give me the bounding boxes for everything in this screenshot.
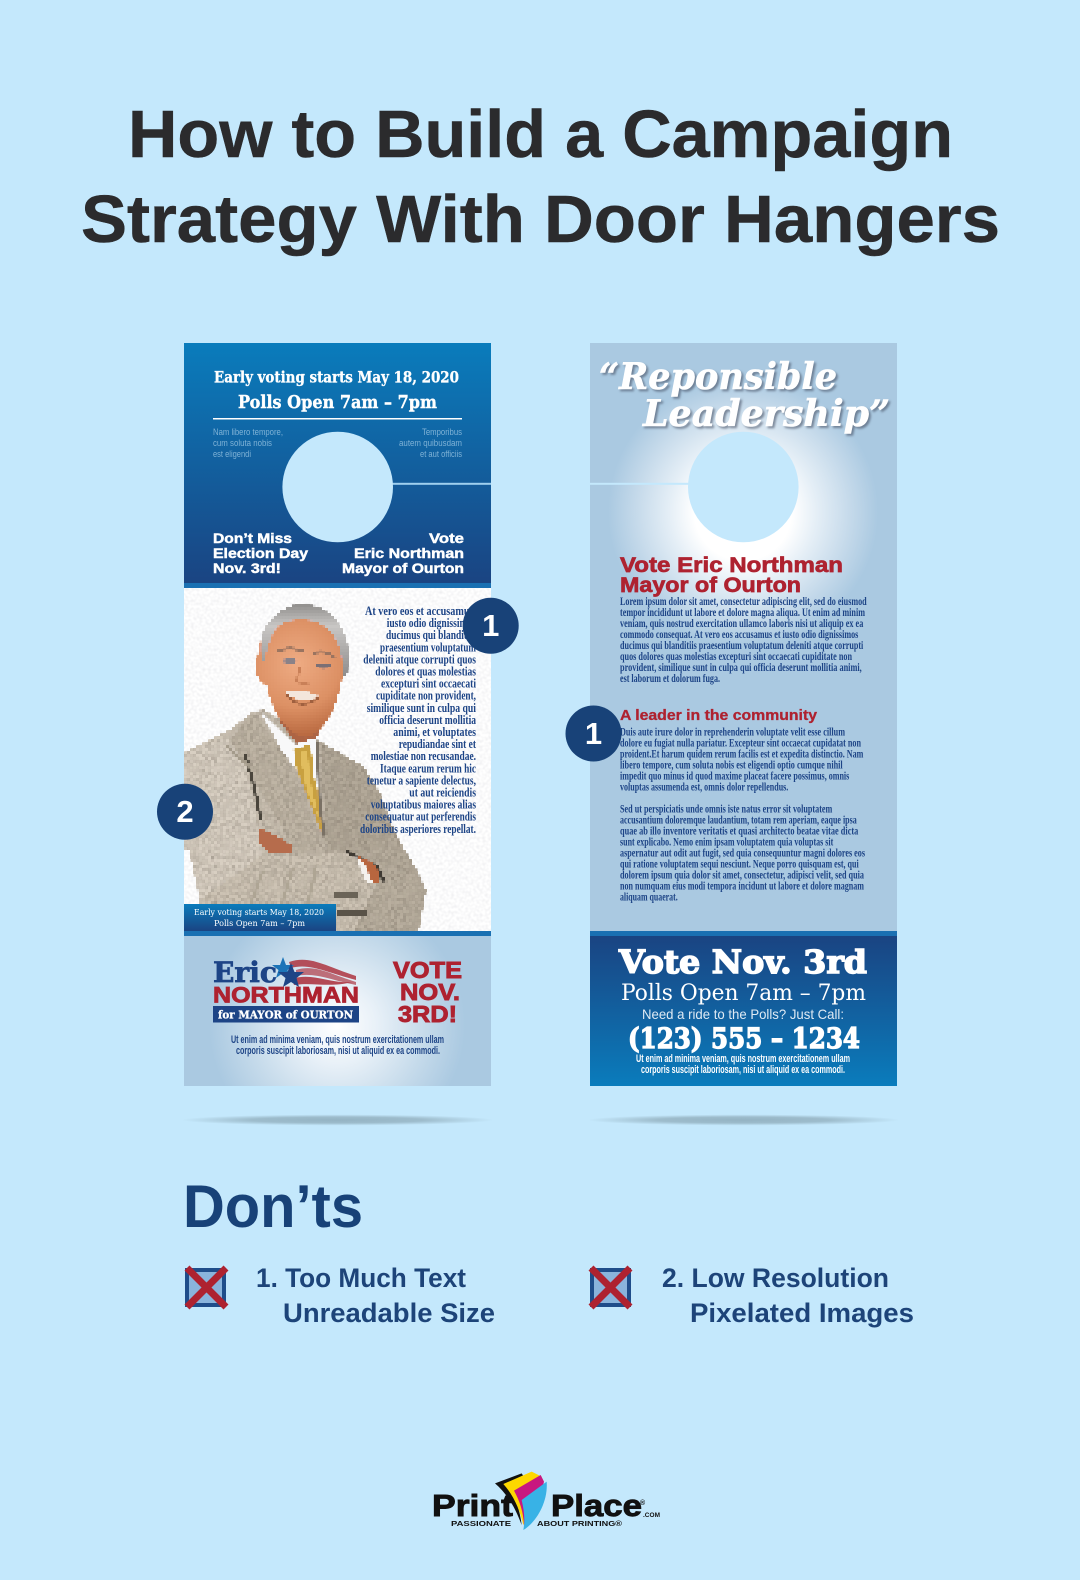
body copy paragraph 1: ducimus qui blanditiis praesentium voluptatum deleniti atque corrupti — [620, 640, 864, 652]
brows and eyes — [278, 648, 335, 658]
logo: PrintPlace: Print — [432, 1488, 513, 1523]
door knob hole — [688, 432, 799, 542]
panel: right door hanger (don't example back) — [590, 343, 897, 1086]
heading: Vote Eric Northman: Vote Eric Northman — [620, 553, 843, 577]
slogan quote: “Reponsible — [599, 356, 837, 398]
heading: Vote Eric Northman — [620, 553, 843, 597]
door knob hole — [282, 432, 393, 542]
icon: folded paper sheets — [495, 1472, 547, 1530]
footer band with candidate logo — [184, 931, 491, 1086]
header band with voting dates: Nam libero tempore, — [213, 427, 283, 437]
body copy: too much text beside photo: officia deserunt mollitia — [379, 713, 477, 727]
body copy: too much text beside photo: consequatur aut perferendis — [365, 810, 476, 824]
header band with voting dates: Vote — [429, 531, 465, 546]
callout 2 on left hanger: 2 — [176, 794, 194, 829]
vote date callout: VOTE — [393, 957, 462, 983]
body copy paragraph 3: qui ratione voluptatem sequi nesciunt. Neque porro quisquam est, qui — [620, 858, 859, 870]
smile — [285, 691, 318, 700]
head — [255, 617, 343, 737]
body copy paragraph 3: dolorem ipsum quia dolor sit amet, consectetur, adipisci velit, sed quia — [620, 869, 864, 881]
photo caption bar: Early voting starts May 18, 2020 — [194, 908, 324, 918]
body copy: too much text beside photo: repudiandae sint et — [399, 737, 477, 751]
body copy paragraph 3: non numquam eius modi tempora incidunt ut labore et dolore magnam — [620, 880, 864, 892]
header band with voting dates — [184, 343, 491, 588]
body copy: too much text beside photo: dolores et quas molestias — [375, 664, 476, 678]
candidate logo: Eric Northman — [213, 956, 359, 1022]
shirt collar — [260, 711, 324, 837]
header band with voting dates: Early voting starts May 18, 2020 — [214, 368, 459, 386]
callout 1 on right hanger: 1 — [585, 716, 602, 751]
body copy: too much text beside photo: tenetur a sapiente delectus, — [367, 773, 476, 787]
body copy paragraph 1: veniam, quis nostrud exercitation ullamco laboris nisi ut aliquip ex ea — [620, 618, 863, 630]
item 1 text: 1. Too Much Text — [256, 1263, 466, 1293]
body copy: too much text beside photo: similique sunt in culpa qui — [367, 701, 476, 715]
item 2: low resolution — [591, 1263, 914, 1328]
pockets — [335, 893, 358, 898]
item 2 text — [662, 1263, 914, 1328]
footer band: vote date and phone: (123) 555 – 1234 — [628, 1022, 860, 1055]
logo: PrintPlace: Place — [551, 1488, 642, 1523]
photo caption bar — [184, 904, 336, 931]
body copy paragraph 1: est laborum et dolorum fuga. — [620, 673, 720, 685]
logo: PrintPlace: PASSIONATE — [451, 1521, 511, 1528]
body copy: too much text beside photo: praesentium voluptatum — [380, 640, 476, 654]
footer band: vote date and phone: corporis suscipit laboriosam, nisi ut aliquid ex ea commodi. — [641, 1064, 845, 1076]
body copy paragraph 1: tempor incididunt ut labore et dolore magna aliqua. Ut enim ad minim — [620, 607, 865, 619]
candidate logo: Eric Northman: NORTHMAN — [213, 982, 359, 1008]
tie — [293, 744, 322, 835]
header band with voting dates: et aut officiis — [420, 449, 462, 459]
body copy: too much text beside photo: molestiae non recusandae. — [371, 749, 476, 763]
body copy paragraph 3: aliquam quaerat. — [620, 891, 678, 903]
body copy: too much text beside photo: cupiditate non provident, — [376, 689, 476, 703]
candidate logo: Eric Northman: for MAYOR of OURTON — [218, 1008, 353, 1022]
header band with voting dates: Temporibus — [422, 427, 462, 437]
photo caption bar: Polls Open 7am – 7pm — [214, 919, 305, 929]
neck — [278, 710, 327, 744]
slogan quote — [599, 356, 890, 435]
footer band: vote date and phone: Ut enim ad minima veniam, quis nostrum exercitationem ullam — [636, 1053, 850, 1065]
icon: crossed checkbox — [187, 1268, 226, 1307]
footer fine print: corporis suscipit laboriosam, nisi ut aliquid ex ea commodi. — [236, 1045, 440, 1057]
body copy paragraph 3: Sed ut perspiciatis unde omnis iste natus error sit voluptatem — [620, 803, 833, 815]
body copy paragraph 2: dolore eu fugiat nulla pariatur. Excepteur sint occaecat cupidatat non — [620, 738, 861, 750]
body copy paragraph 3 — [620, 803, 865, 903]
header band with voting dates: autem quibusdam — [399, 438, 462, 448]
body copy: too much text beside photo: iusto odio dignissimos — [387, 616, 476, 630]
body copy paragraph 2: Duis aute irure dolor in reprehenderin voluptate velit esse cillum — [620, 727, 845, 739]
body copy: too much text beside photo: ducimus qui blanditiis — [386, 628, 476, 642]
header band with voting dates: Nov. 3rd! — [213, 561, 281, 576]
icon: crossed checkbox — [591, 1268, 630, 1307]
body copy paragraph 1: Lorem ipsum dolor sit amet, consectetur adipiscing elit, sed do eiusmod — [620, 596, 867, 608]
vote date callout: 3RD! — [398, 1001, 457, 1027]
ground shadow under right hanger — [588, 1114, 900, 1126]
item 1: too much text — [187, 1263, 495, 1328]
header band with voting dates: Election Day — [213, 546, 309, 561]
slogan quote: Leadership” — [642, 393, 890, 435]
body copy paragraph 3: accusantium doloremque laudantium, totam rem aperiam, eaque ipsa — [620, 814, 857, 826]
body copy paragraph 3: aspernatur aut odit aut fugit, sed quia consequuntur magni dolores eos — [620, 847, 865, 859]
body copy: too much text beside photo: animi, et voluptates — [393, 725, 476, 739]
subheading: a leader in the community: A leader in the community — [620, 707, 818, 724]
header band with voting dates: Polls Open 7am – 7pm — [238, 392, 437, 413]
header band with voting dates: cum soluta nobis — [213, 438, 272, 448]
body copy paragraph 3: sunt explicabo. Nemo enim ipsam voluptatem quia voluptas sit — [620, 836, 833, 848]
title: Strategy With Door Hangers — [81, 182, 1000, 257]
body copy paragraph 2: impedit quo minus id quod maxime placeat facere possimus, omnis — [620, 771, 850, 783]
vote date callout — [393, 957, 462, 1027]
callout 1 on right hanger — [566, 706, 622, 762]
body copy paragraph 2: voluptas assumenda est, omnis dolor repellendus. — [620, 782, 788, 794]
vote date callout: NOV. — [400, 979, 460, 1005]
footer band: vote date and phone: Vote Nov. 3rd — [618, 943, 867, 981]
body copy: too much text beside photo: excepturi sint occaecati — [381, 677, 476, 691]
heading: Vote Eric Northman: Mayor of Ourton — [620, 573, 801, 597]
body copy paragraph 2: proident.Et harum quidem rerum facilis est et expedita distinctio. Nam — [620, 749, 864, 761]
body copy: too much text beside photo — [360, 604, 477, 836]
pixelated portrait of candidate — [183, 604, 426, 932]
item 2 text: 2. Low Resolution — [662, 1263, 889, 1293]
footer band: vote date and phone: Need a ride to the Polls? Just Call: — [642, 1006, 844, 1022]
footer fine print: Ut enim ad minima veniam, quis nostrum exercitationem ullam — [231, 1034, 444, 1046]
item 1 text: Unreadable Size — [283, 1298, 495, 1328]
die-cut slit line — [590, 483, 690, 485]
item 1 text — [256, 1263, 495, 1328]
callout 2 on left hanger — [157, 784, 213, 840]
body copy paragraph 2 — [620, 727, 864, 794]
header band with voting dates: Mayor of Ourton — [342, 561, 464, 576]
ground shadow under left hanger — [182, 1114, 494, 1126]
header band with voting dates: Eric Northman — [354, 546, 464, 561]
header band with voting dates: Don’t Miss — [213, 531, 292, 546]
logo: PrintPlace: ® — [640, 1499, 646, 1507]
panel: left door hanger (don't example front) — [183, 343, 491, 1086]
white photo area — [184, 588, 491, 931]
footer band: vote date and phone: Polls Open 7am – 7pm — [621, 981, 866, 1006]
body copy: too much text beside photo: voluptatibus maiores alias — [371, 798, 476, 812]
body copy: too much text beside photo: ut aut reiciendis — [409, 786, 476, 800]
body copy paragraph 3: quae ab illo inventore veritatis et quasi architecto beatae vitae dicta — [620, 825, 858, 837]
header band with voting dates: est eligendi — [213, 449, 251, 459]
item 2 text: Pixelated Images — [690, 1298, 914, 1328]
title — [81, 97, 1000, 257]
logo: PrintPlace: .COM — [643, 1513, 660, 1519]
body copy: too much text beside photo: doloribus asperiores repellat. — [360, 822, 476, 836]
hands — [260, 828, 292, 854]
body copy: too much text beside photo: Itaque earum rerum hic — [380, 761, 476, 775]
footer fine print — [231, 1034, 444, 1057]
heading: Don'ts: Don’ts — [183, 1173, 363, 1240]
body copy paragraph 1: commodo consequat. At vero eos accusamus et iusto odio dignissimos — [620, 629, 859, 641]
body copy paragraph 1: quos dolores quas molestias excepturi sint occaecati cupiditate non — [620, 651, 852, 663]
body copy paragraph 1 — [620, 596, 867, 685]
logo: PrintPlace: ABOUT PRINTING® — [537, 1520, 623, 1528]
body copy: too much text beside photo: At vero eos et accusamus, — [365, 604, 476, 618]
title: How to Build a Campaign — [128, 97, 953, 172]
callout 1 on left hanger — [463, 598, 519, 654]
body copy paragraph 1: provident, similique sunt in culpa qui officia deserunt mollitia animi, — [620, 662, 862, 674]
logo: PrintPlace — [432, 1472, 660, 1530]
crease lines — [245, 753, 261, 820]
body copy paragraph 2: libero tempore, cum soluta nobis est eligendi optio cumque nihil — [620, 760, 843, 772]
body copy: too much text beside photo: deleniti atque corrupti quos — [363, 652, 476, 666]
candidate logo: Eric Northman: Eric — [213, 956, 277, 989]
footer band: vote date and phone — [590, 931, 897, 1086]
callout 1 on left hanger: 1 — [482, 608, 499, 643]
